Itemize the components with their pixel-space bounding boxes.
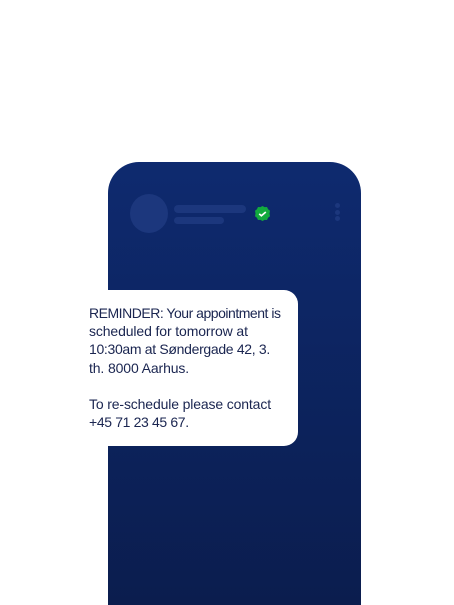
message text: REMINDER: Your appointment is [89, 305, 281, 321]
icon: verified badge [255, 206, 270, 221]
contact name placeholder [174, 205, 246, 213]
message text: th. 8000 Aarhus. [89, 360, 189, 376]
callout: SMS message bubble [72, 290, 298, 446]
message text: scheduled for tomorrow at [89, 323, 248, 339]
message text: +45 71 23 45 67. [89, 414, 189, 430]
message text: To re-schedule please contact [89, 396, 271, 412]
icon: three-dot menu [335, 203, 340, 221]
avatar placeholder [130, 194, 168, 233]
message text: 10:30am at Søndergade 42, 3. [89, 341, 270, 357]
panel: phone [108, 162, 361, 605]
message text [89, 305, 281, 430]
contact detail placeholder [174, 217, 224, 224]
